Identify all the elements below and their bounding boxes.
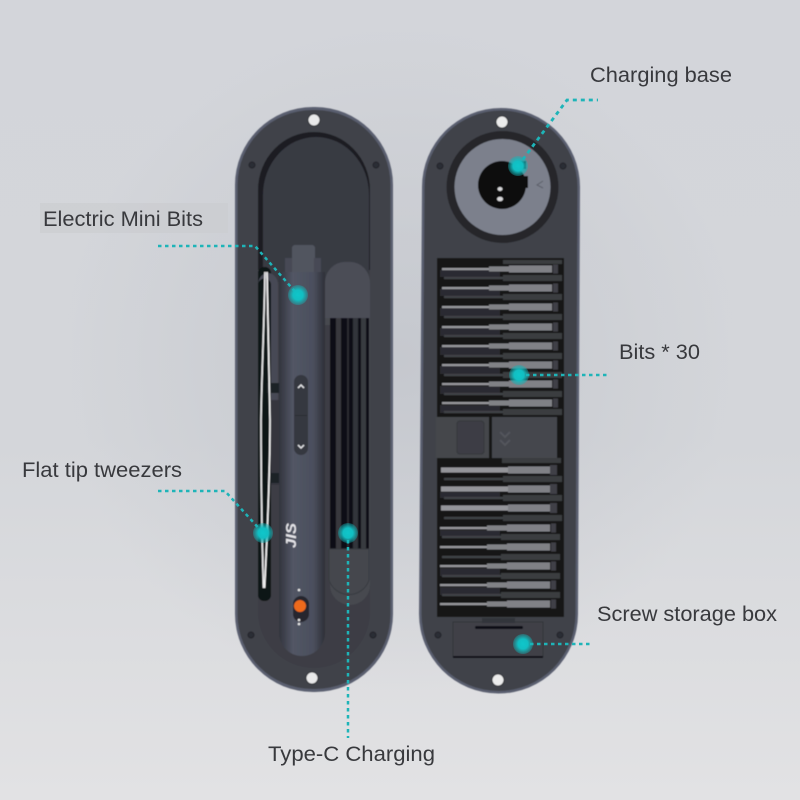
mount hole bottom	[492, 674, 504, 686]
lower bits	[440, 465, 562, 608]
case screws	[435, 163, 566, 638]
tweezers	[261, 272, 265, 588]
label: Bits * 30: Bits * 30	[619, 340, 700, 364]
bit tray	[436, 258, 564, 617]
mount hole top	[496, 116, 508, 128]
leader: Bits * 30	[509, 365, 610, 385]
bit holder	[325, 262, 370, 605]
leader: Charging base	[508, 100, 598, 176]
upper bits	[442, 264, 562, 415]
panel: left case with screwdriver	[235, 107, 393, 692]
panel: right case with bits	[419, 108, 580, 694]
cavity	[258, 132, 370, 668]
leader: Type-C Charging	[338, 523, 358, 738]
electric screwdriver	[279, 245, 325, 656]
mount hole bottom	[306, 672, 318, 684]
brand mark: JIS	[283, 523, 300, 548]
tweezers slot	[258, 267, 279, 601]
case shell	[419, 108, 580, 694]
label: Charging base: Charging base	[590, 63, 732, 87]
label: Screw storage box: Screw storage box	[597, 602, 777, 626]
leader: Electric Mini Bits	[158, 246, 308, 305]
charging base	[446, 131, 558, 243]
case screws	[248, 162, 379, 638]
slide button	[294, 375, 308, 455]
mount hole top	[308, 114, 320, 126]
leader: Flat tip tweezers	[158, 491, 273, 543]
case shell	[235, 107, 393, 692]
label: Electric Mini Bits: Electric Mini Bits	[43, 207, 203, 231]
leader: Screw storage box	[513, 634, 592, 654]
power button	[293, 596, 309, 622]
screw storage box	[453, 618, 543, 658]
label: Flat tip tweezers: Flat tip tweezers	[22, 458, 182, 482]
centre blocks	[436, 417, 489, 458]
label: Type-C Charging: Type-C Charging	[268, 742, 435, 766]
label backdrop: Electric Mini Bits	[40, 203, 228, 233]
